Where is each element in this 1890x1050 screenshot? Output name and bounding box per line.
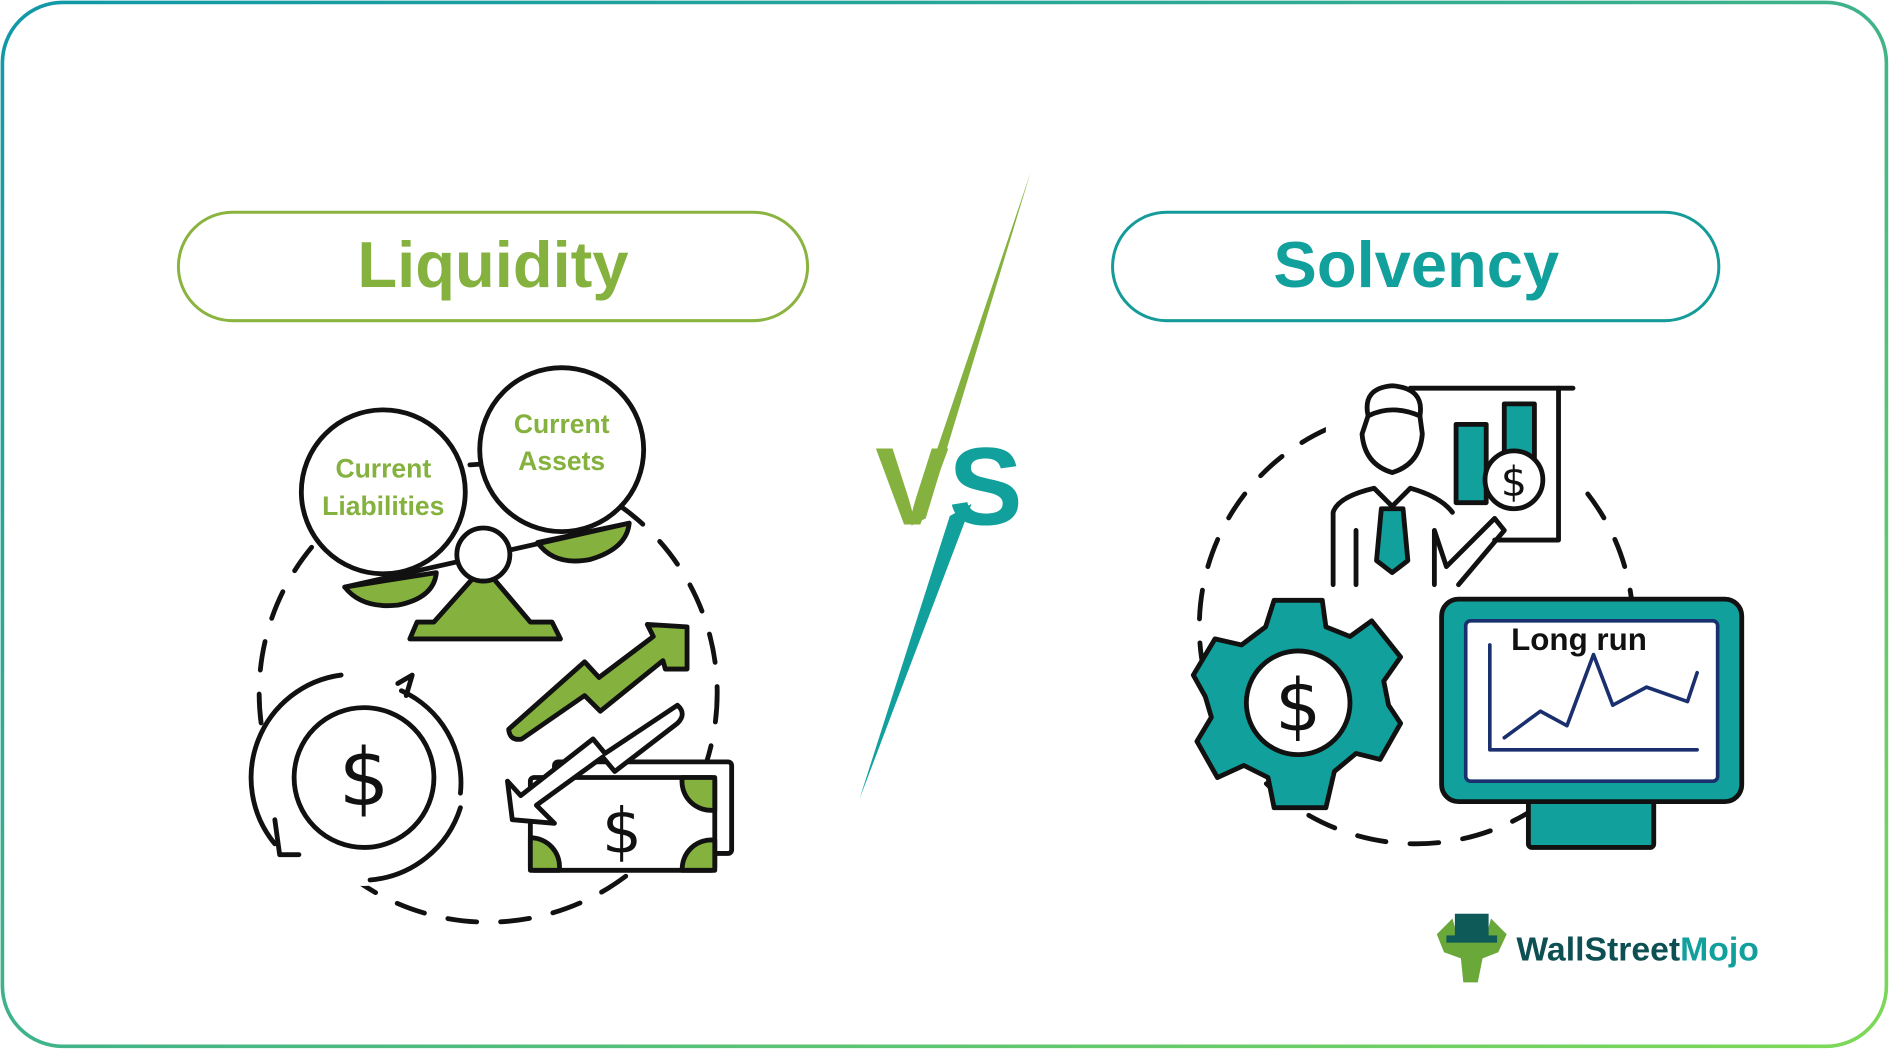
circle labels: Liabilities bbox=[322, 491, 444, 521]
icon: monitor with chart bbox=[1442, 599, 1742, 847]
icon: presenter with chart bbox=[1326, 383, 1579, 588]
heading: Liquidity: Liquidity bbox=[357, 228, 629, 301]
logo: WallStreetMojo bbox=[1437, 914, 1759, 982]
circle labels bbox=[322, 409, 610, 521]
icon: money bill: $ bbox=[602, 794, 642, 867]
VS divider: V bbox=[875, 425, 949, 548]
heading: Solvency bbox=[1113, 212, 1719, 321]
icon: monitor with chart: Long run bbox=[1511, 622, 1647, 657]
icon: gear with dollar bbox=[1193, 600, 1401, 808]
icon: presenter with chart: $ bbox=[1501, 457, 1527, 505]
logo: WallStreetMojo: WallStreetMojo bbox=[1516, 931, 1759, 969]
icon: gear with dollar: $ bbox=[1275, 665, 1321, 749]
illustration: liquidity bbox=[251, 368, 732, 922]
illustration: solvency bbox=[1193, 383, 1742, 847]
circle labels: Current bbox=[335, 453, 431, 483]
VS divider bbox=[859, 172, 1031, 799]
balance scale bbox=[301, 368, 644, 639]
heading: Solvency: Solvency bbox=[1273, 228, 1559, 301]
icon: coin cycle bbox=[251, 669, 472, 886]
heading: Liquidity bbox=[178, 212, 808, 321]
circle labels: Current bbox=[514, 409, 610, 439]
icon: coin cycle: $ bbox=[339, 731, 389, 824]
circle labels: Assets bbox=[518, 446, 605, 476]
icon: money bill bbox=[530, 762, 732, 870]
icon: up/down arrows bbox=[507, 624, 687, 823]
VS divider: S bbox=[949, 425, 1023, 548]
